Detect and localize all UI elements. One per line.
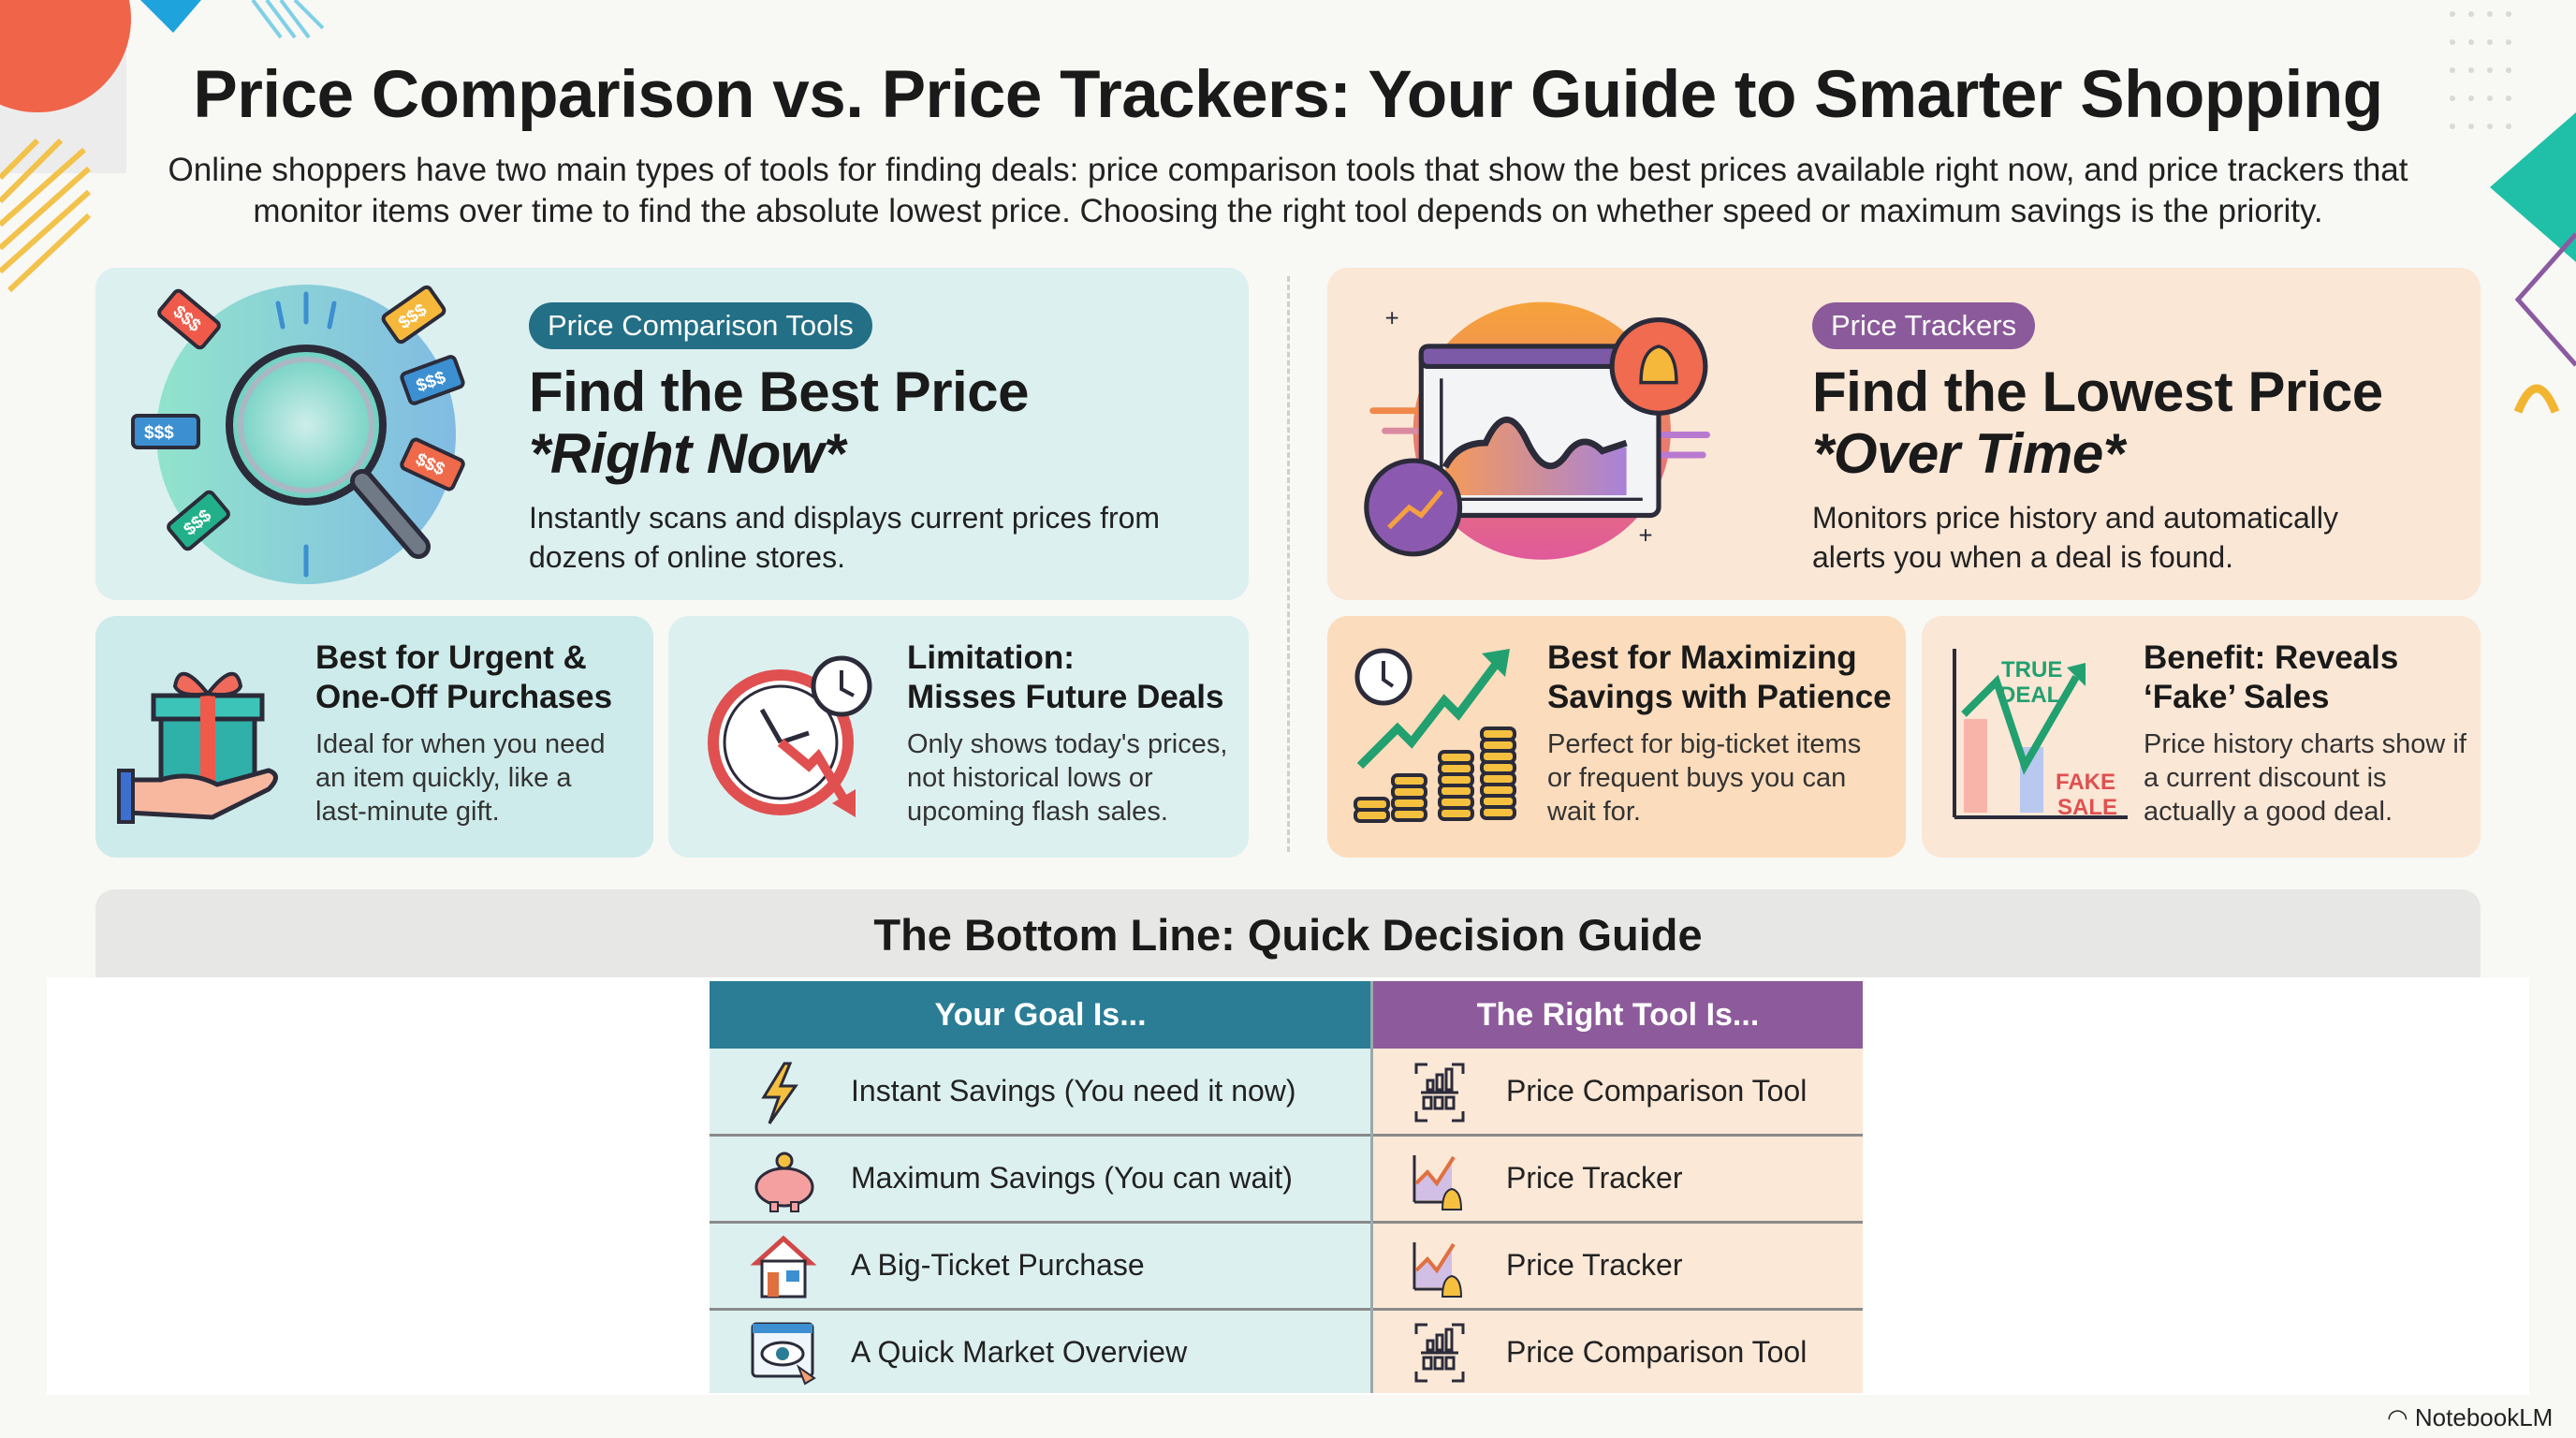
row 4: Price Comparison Tool: [1506, 1335, 1807, 1369]
icon: magnifier with price tags: $$$: [144, 423, 174, 443]
icon: magnifier with price tags: $$$: [413, 449, 448, 480]
icon: house: [751, 1236, 816, 1298]
icon: comparison bars: [1415, 1324, 1464, 1382]
card body: Ideal for when you need an item quickly, like a last-minute gift.: [315, 729, 606, 827]
pill label: Price Comparison Tools: [548, 309, 854, 342]
card: maximizing savings: [1327, 616, 1906, 858]
card title: [2144, 639, 2398, 715]
title: Price Comparison vs. Price Trackers: Your Guide to Smarter Shopping: [193, 58, 2383, 132]
row 2: Maximum Savings (You can wait): [851, 1161, 1293, 1195]
row 1: Instant Savings (You need it now): [851, 1074, 1296, 1108]
row 3: Price Tracker: [1506, 1248, 1682, 1282]
card title: [315, 639, 612, 715]
card: fake sales: [1922, 616, 2481, 858]
card body: Price history charts show if a current discount is actually a good deal.: [2144, 729, 2466, 827]
heading: [529, 360, 1029, 485]
card body: Perfect for big-ticket items or frequent buys you can wait for.: [1547, 729, 1861, 827]
pill label: [1812, 302, 2035, 349]
panel: price trackers: [1327, 268, 2481, 600]
icon: magnifier with price tags: $$$: [414, 368, 448, 396]
row 4: [751, 1322, 1807, 1386]
subtitle: Online shoppers have two main types of tools for finding deals: price comparison tools that show the best prices available right now, and price trackers that monitor items over time to find the absolute lowest price. Choosing the right tool depends on whether speed or maximum savings is the priority.: [168, 152, 2408, 229]
card title: One-Off Purchases: [315, 679, 612, 715]
card title: Best for Urgent &: [315, 639, 587, 676]
icon: magnifier with price tags: $$$: [168, 302, 205, 336]
row 1: [761, 1062, 1807, 1124]
card body: Only shows today's prices, not historical lows or upcoming flash sales.: [907, 729, 1227, 827]
white backdrop: [47, 977, 2529, 1395]
description: Monitors price history and automatically alerts you when a deal is found.: [1812, 501, 2338, 574]
description: Instantly scans and displays current prices from dozens of online stores.: [529, 501, 1160, 574]
icon: lightning: [761, 1062, 798, 1124]
header: right tool: The Right Tool Is...: [1477, 997, 1759, 1033]
icon: coins with rising arrow: [1354, 648, 1516, 823]
icon: piggy bank: [754, 1152, 814, 1212]
row 2: Price Tracker: [1506, 1161, 1682, 1195]
card title: Best for Maximizing: [1547, 639, 1857, 676]
card title: [907, 639, 1223, 715]
divider: [1287, 276, 1290, 852]
heading: Find the Best Price: [529, 360, 1029, 423]
icon: true deal / fake sale chart: SALE: [2057, 795, 2117, 820]
icon: true deal / fake sale chart: FAKE: [2056, 770, 2115, 795]
decoration: top-left shapes: [0, 0, 126, 173]
card title: Benefit: Reveals: [2144, 639, 2398, 676]
icon: tracker chart bell: [1413, 1155, 1462, 1211]
header: right tool: [1373, 981, 1863, 1049]
icon: true deal / fake sale chart: [1953, 649, 2128, 820]
row 1: Price Comparison Tool: [1506, 1074, 1807, 1108]
icon: comparison bars: [1415, 1064, 1464, 1122]
card title: ‘Fake’ Sales: [2144, 679, 2329, 715]
icon: price chart with bell: +: [1385, 305, 1399, 331]
row 2: [754, 1152, 1682, 1212]
heading: *Over Time*: [1812, 422, 2125, 485]
row 3: [751, 1236, 1682, 1298]
pill label: [529, 302, 872, 349]
icon: magnifier with price tags: [131, 285, 465, 584]
header: your goal: Your Goal Is...: [934, 997, 1147, 1033]
row 4: A Quick Market Overview: [851, 1335, 1187, 1369]
icon: browser eye: [751, 1322, 816, 1386]
decoration: right shapes: [2450, 11, 2576, 414]
icon: price chart with bell: [1364, 301, 1710, 560]
card title: Savings with Patience: [1547, 679, 1892, 715]
icon: price chart with bell: +: [1638, 523, 1653, 550]
card title: Limitation:: [907, 639, 1075, 676]
row 3: A Big-Ticket Purchase: [851, 1248, 1145, 1282]
icon: clock with down arrow: [708, 655, 872, 817]
banner: bottom line heading: [95, 889, 2481, 977]
icon: true deal / fake sale chart: DEAL: [1999, 682, 2060, 708]
icon: true deal / fake sale chart: TRUE: [2001, 657, 2062, 682]
icon: magnifier with price tags: $$$: [395, 301, 431, 333]
header: your goal: [710, 981, 1371, 1049]
icon: magnifier with price tags: $$$: [180, 506, 216, 540]
panel: price comparison tools: [95, 268, 1249, 600]
pill label: Price Trackers: [1831, 309, 2016, 342]
card: limitation: [668, 616, 1249, 858]
icon: tracker chart bell: [1413, 1242, 1462, 1298]
heading: Find the Lowest Price: [1812, 360, 2383, 423]
heading: [1812, 360, 2383, 485]
decision table: [710, 981, 1863, 1393]
heading: *Right Now*: [529, 422, 845, 485]
card: urgent purchases: [95, 616, 653, 858]
card title: [1547, 639, 1892, 715]
banner: bottom line heading: The Bottom Line: Quick Decision Guide: [873, 910, 1703, 960]
icon: gift in hand: [117, 672, 278, 824]
footer: NotebookLM mark: ◠ NotebookLM: [2387, 1403, 2553, 1431]
card title: Misses Future Deals: [907, 679, 1223, 715]
